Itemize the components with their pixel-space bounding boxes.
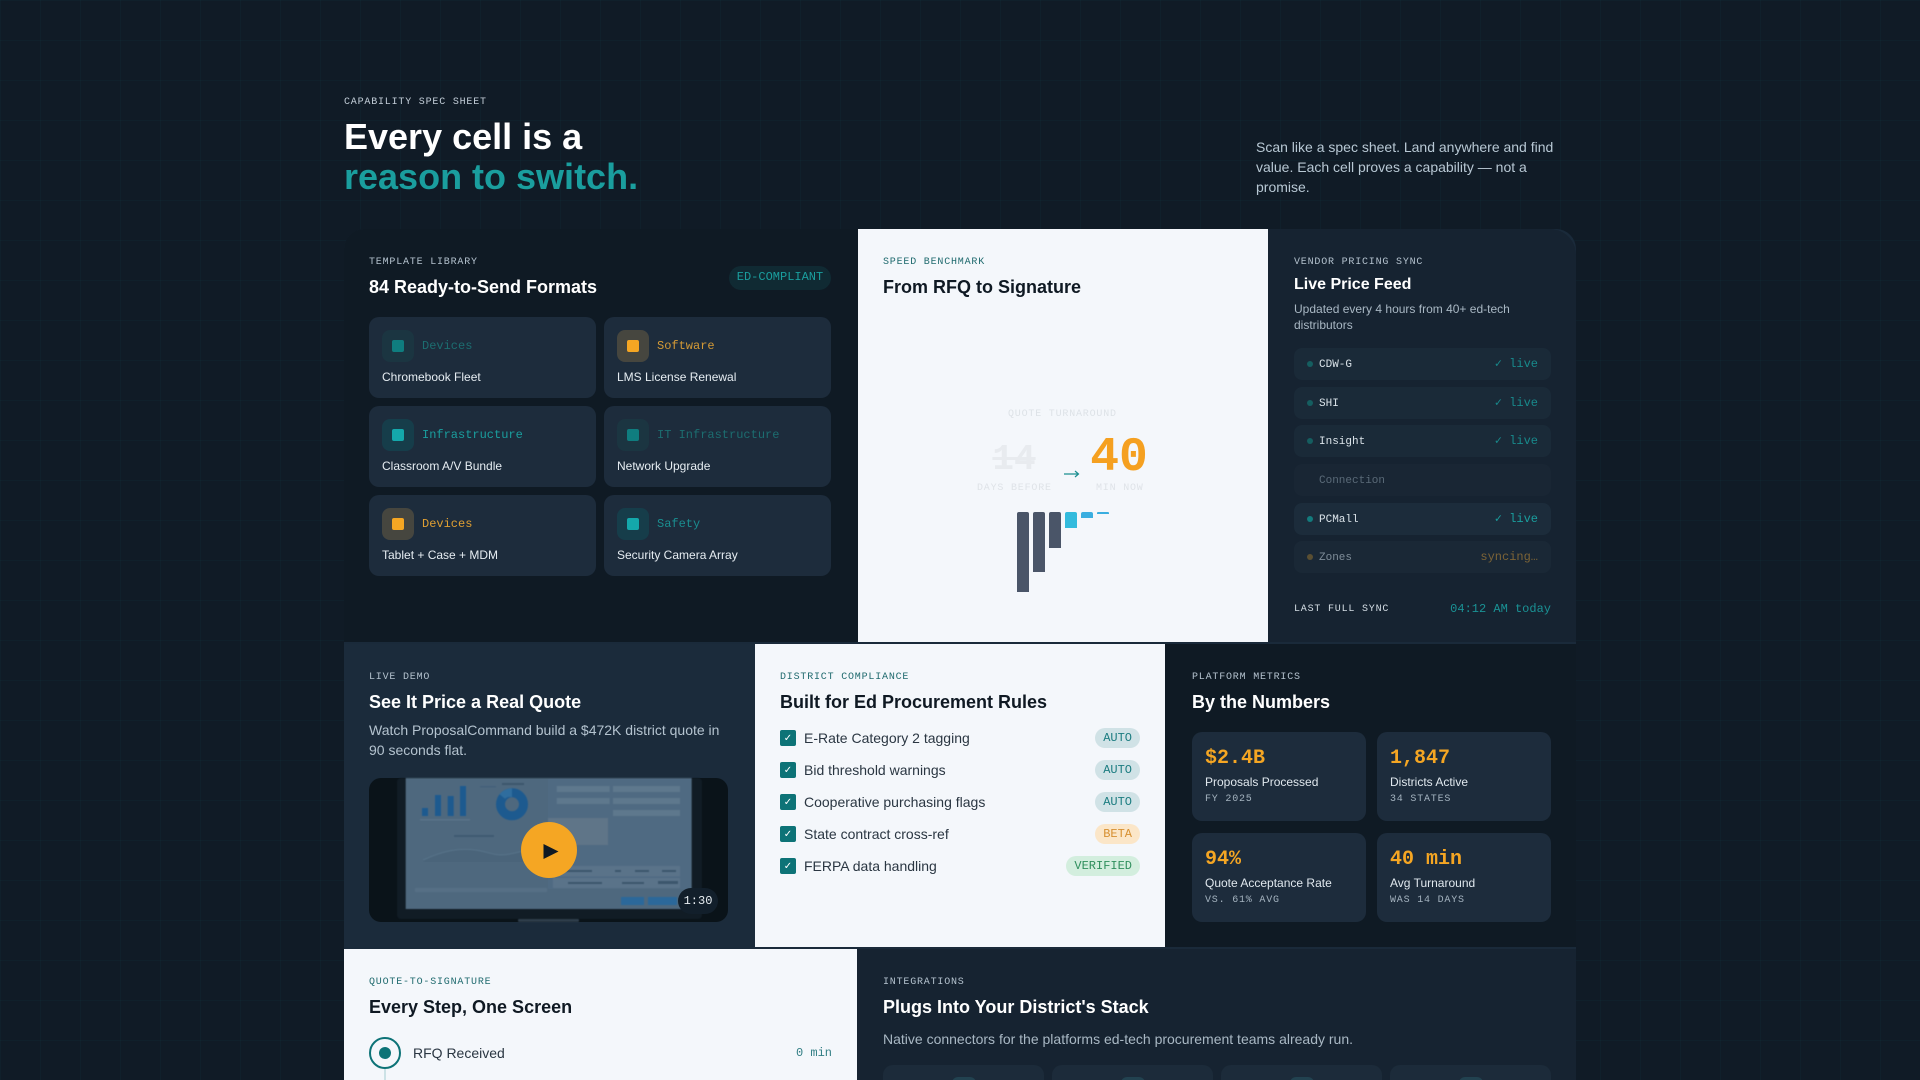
integration tile 1 [883,1065,1044,1080]
feed row: CDW-G [1294,348,1551,380]
last full sync label: LAST FULL SYNC [1294,604,1389,615]
panel: vendor pricing sync [1268,229,1576,642]
compliance heading: Built for Ed Procurement Rules [780,692,1047,712]
feed row: PCMall: ✓ live [1495,512,1538,526]
panel: district compliance [755,644,1165,947]
hero eyebrow: CAPABILITY SPEC SHEET [344,97,487,108]
checklist item: e-rate [780,728,1140,748]
card: security camera array: Security Camera Array [617,548,738,562]
stat: avg turnaround: WAS 14 DAYS [1390,895,1465,906]
stat: quote acceptance: VS. 61% AVG [1205,895,1280,906]
stat: districts active: 34 STATES [1390,794,1451,805]
duration badge [678,888,718,914]
feed row: Connection: Connection [1319,475,1385,487]
feed row: SHI [1294,387,1551,419]
feed row: Zones [1294,541,1551,573]
live demo description: 90 seconds flat. [369,742,467,758]
metrics heading: By the Numbers [1192,692,1330,712]
checklist item: ferpa: ✓ [784,861,792,872]
checklist item: cooperative purchasing [780,792,1140,812]
hero title: reason to switch. [344,156,638,197]
card: security camera array [604,495,831,576]
badge: ed-compliant: ED-COMPLIANT [737,270,823,284]
stat: quote acceptance: Quote Acceptance Rate [1205,876,1332,890]
step label: rfq received: RFQ Received [413,1045,505,1061]
panel: quote to signature [344,949,857,1080]
panel: integrations [857,949,1576,1080]
feed row: PCMall: PCMall [1319,514,1359,526]
feed row: Insight [1294,425,1551,457]
card: security camera array: Safety [657,517,700,531]
hero description [1256,139,1553,195]
quote to signature heading: Every Step, One Screen [369,997,572,1017]
card: lms license renewal: Software [657,339,715,353]
checklist item: ferpa [780,856,1140,876]
checklist item: state contract: State contract cross-ref [804,826,949,842]
checklist item: ferpa: VERIFIED [1074,859,1132,873]
hero title [344,116,638,197]
template library heading: 84 Ready-to-Send Formats [369,277,597,297]
stat: avg turnaround: 40 min [1390,848,1462,871]
arrow [1064,470,1080,478]
vendor heading: Live Price Feed [1294,276,1411,293]
card: tablet case mdm: Devices [422,517,472,531]
vendor description: distributors [1294,318,1353,332]
card: chromebook fleet: Chromebook Fleet [382,370,481,384]
video player [369,778,728,922]
checklist item: state contract: ✓ [784,829,792,840]
panel: platform metrics [1165,644,1576,947]
integrations heading: Plugs Into Your District's Stack [883,997,1149,1017]
days before label: DAYS BEFORE [977,483,1052,494]
integration tile 3 [1221,1065,1382,1080]
checklist item: bid threshold: AUTO [1103,763,1132,777]
checklist item: e-rate: AUTO [1103,731,1132,745]
stat: avg turnaround [1377,833,1551,922]
template library eyebrow: TEMPLATE LIBRARY [369,257,478,268]
card: tablet case mdm [369,495,596,576]
feed row: Zones: syncing… [1480,550,1538,564]
step time: 0 min [796,1046,832,1060]
stat: districts active: 1,847 [1390,747,1450,770]
checklist item: cooperative purchasing: Cooperative purchasing flags [804,794,985,810]
checklist item: e-rate: E-Rate Category 2 tagging [804,730,970,746]
feed row: Insight: Insight [1319,436,1365,448]
stat: quote acceptance [1192,833,1366,922]
card: network upgrade: Network Upgrade [617,459,710,473]
stat: proposals processed [1192,732,1366,821]
before value 14: 14 [992,439,1036,480]
card: network upgrade: IT Infrastructure [657,428,779,442]
integrations eyebrow: INTEGRATIONS [883,977,965,988]
spec sheet grid [344,229,1576,1080]
step marker with connector [369,1037,401,1080]
checklist item: state contract: BETA [1103,827,1132,841]
quote turnaround label: QUOTE TURNAROUND [1008,409,1117,420]
compliance eyebrow: DISTRICT COMPLIANCE [780,672,909,683]
duration badge: 1:30 [684,894,712,908]
bar chart: turnaround decline [1017,512,1109,592]
panel: live demo [344,644,755,947]
stat: districts active: Districts Active [1390,775,1468,789]
quote to signature eyebrow: QUOTE-TO-SIGNATURE [369,977,491,988]
checklist item: bid threshold [780,760,1140,780]
checklist item: e-rate: ✓ [784,733,792,744]
hero description: Scan like a spec sheet. Land anywhere and find [1256,139,1553,155]
integration tile 4 [1390,1065,1551,1080]
feed row: PCMall [1294,503,1551,535]
checklist item: ferpa: FERPA data handling [804,858,937,874]
speed benchmark eyebrow: SPEED BENCHMARK [883,257,985,268]
stat: proposals processed: FY 2025 [1205,794,1253,805]
vendor description: Updated every 4 hours from 40+ ed-tech [1294,302,1510,316]
card: lms license renewal: LMS License Renewal [617,370,736,384]
card: classroom av bundle [369,406,596,487]
feed row: Connection [1294,464,1551,496]
live demo description: Watch ProposalCommand build a $472K district quote in [369,722,719,738]
metrics eyebrow: PLATFORM METRICS [1192,672,1301,683]
checklist item: bid threshold: Bid threshold warnings [804,762,946,778]
checklist item: cooperative purchasing: AUTO [1103,795,1132,809]
hero title: Every cell is a [344,116,582,157]
panel: template library [344,229,858,642]
play button [521,822,577,878]
feed row: SHI: ✓ live [1495,396,1538,410]
card: chromebook fleet [369,317,596,398]
min now label: MIN NOW [1096,483,1144,494]
card: chromebook fleet: Devices [422,339,472,353]
stat: proposals processed: $2.4B [1205,747,1265,770]
feed row: Insight: ✓ live [1495,434,1538,448]
integration tile 2 [1052,1065,1213,1080]
integrations description: Native connectors for the platforms ed-tech procurement teams already run. [883,1031,1353,1047]
checklist item: bid threshold: ✓ [784,765,792,776]
card: classroom av bundle: Classroom A/V Bundle [382,459,502,473]
last full sync time: 04:12 AM today [1450,602,1551,616]
vendor eyebrow: VENDOR PRICING SYNC [1294,257,1423,268]
panel: speed benchmark [858,229,1268,642]
checklist item: cooperative purchasing: ✓ [784,797,792,808]
stat: proposals processed: Proposals Processed [1205,775,1318,789]
live demo heading: See It Price a Real Quote [369,692,581,712]
feed row: SHI: SHI [1319,398,1339,410]
live demo description [369,722,719,758]
feed row: CDW-G: CDW-G [1319,359,1352,371]
card: network upgrade [604,406,831,487]
hero description: value. Each cell proves a capability — not a [1256,159,1527,175]
stat: quote acceptance: 94% [1205,848,1241,871]
feed row: CDW-G: ✓ live [1495,357,1538,371]
stat: avg turnaround: Avg Turnaround [1390,876,1475,890]
stat: districts active [1377,732,1551,821]
after value 40: 40 [1090,431,1148,485]
vendor description [1294,302,1510,332]
laptop frame and dashboard screenshot [398,778,702,922]
card: tablet case mdm: Tablet + Case + MDM [382,548,498,562]
live demo eyebrow: LIVE DEMO [369,672,430,683]
card: lms license renewal [604,317,831,398]
badge: ed-compliant [729,266,831,290]
feed row: Zones: Zones [1319,552,1352,564]
speed benchmark heading: From RFQ to Signature [883,277,1081,297]
card: classroom av bundle: Infrastructure [422,428,523,442]
checklist item: state contract [780,824,1140,844]
hero description: promise. [1256,179,1310,195]
